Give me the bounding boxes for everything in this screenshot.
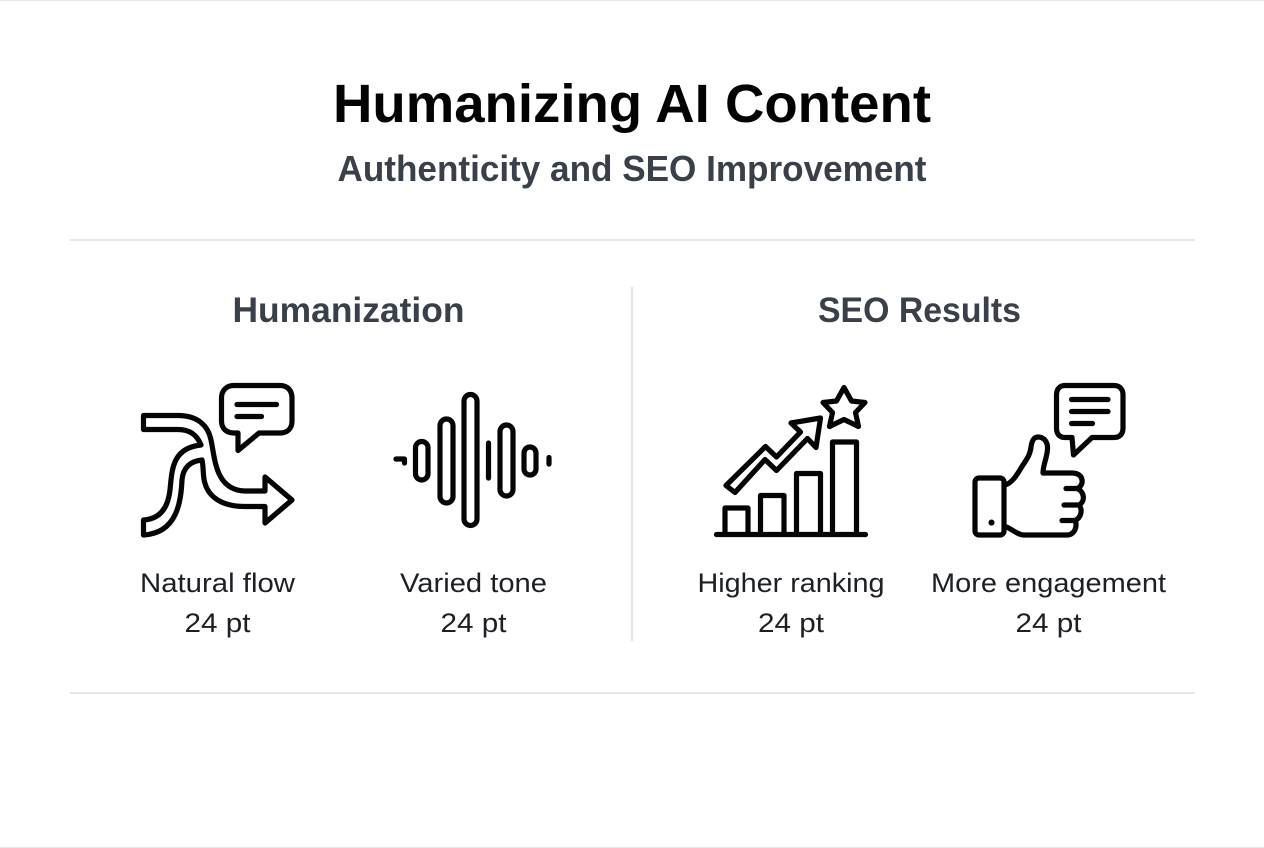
label: Higher ranking: Higher ranking (698, 568, 884, 598)
value: Natural flow 24 pt: 24 pt (184, 608, 251, 638)
value: Varied tone 24 pt: 24 pt (440, 608, 507, 638)
icon: sound wave (396, 394, 549, 526)
panel: humanization (140, 291, 549, 638)
label: More engagement: More engagement (931, 568, 1167, 598)
value: Higher ranking 24 pt: 24 pt (758, 608, 825, 638)
heading: SEO Results: SEO Results (818, 291, 1021, 330)
icon: thumbs up with speech bubble (975, 386, 1123, 535)
subtitle: Authenticity and SEO Improvement (338, 148, 927, 189)
title: Humanizing AI Content (333, 74, 931, 134)
icon: merging arrows with speech bubble (144, 386, 292, 535)
icon: rising bar chart with star (716, 388, 866, 534)
heading: Humanization: Humanization (232, 291, 464, 330)
label: Natural flow: Natural flow (140, 568, 296, 598)
label: Varied tone: Varied tone (400, 568, 547, 598)
panel: seo results (698, 291, 1167, 638)
value: More engagement 24 pt: 24 pt (1016, 608, 1082, 638)
